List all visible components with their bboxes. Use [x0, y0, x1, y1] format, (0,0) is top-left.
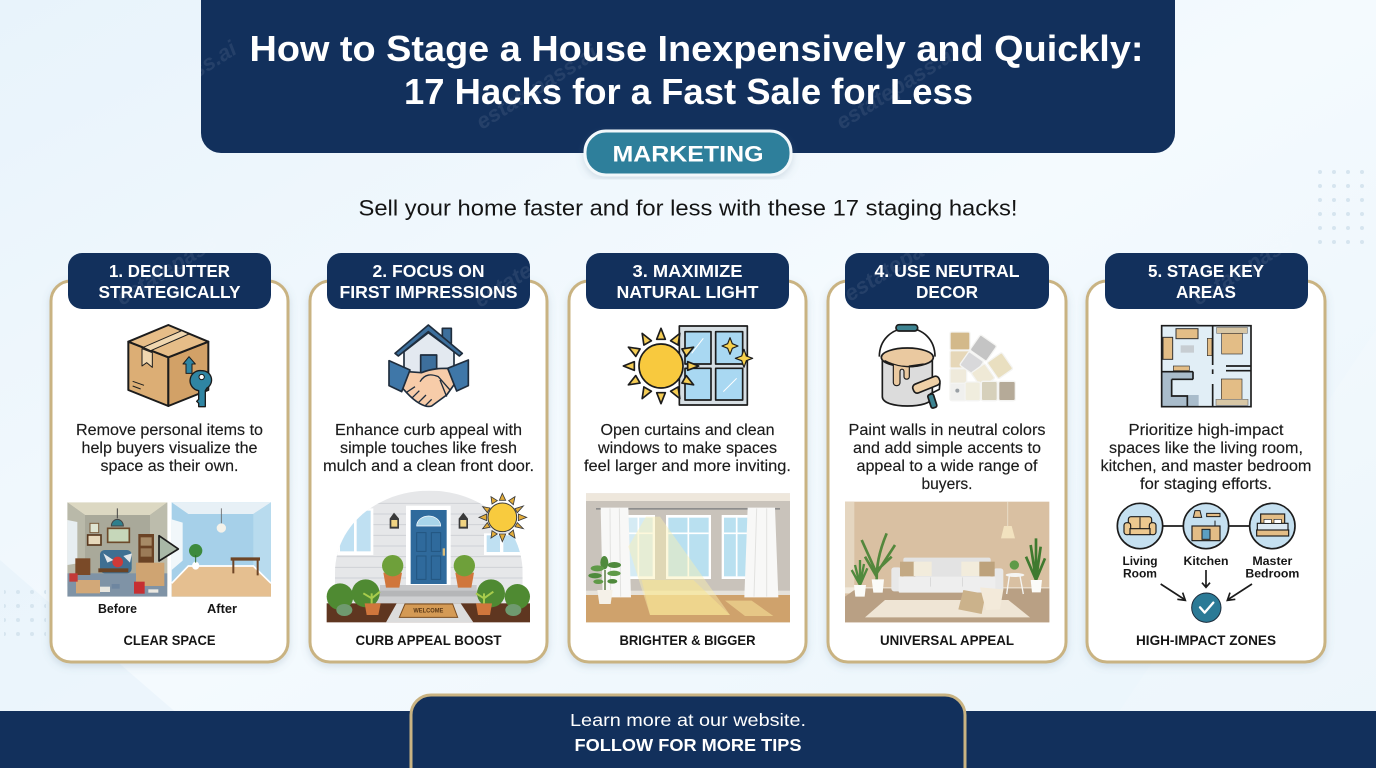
heading: estatepass: [111, 229, 221, 310]
description: mulch and a clean front door.: [323, 458, 534, 475]
caption: UNIVERSAL APPEAL: [880, 632, 1014, 648]
before and after image: [67, 502, 271, 597]
caption: BRIGHTER & BIGGER: [620, 632, 756, 648]
after label: After: [207, 602, 237, 616]
description: [848, 422, 1046, 493]
curb appeal image: [327, 491, 530, 622]
description: [1100, 422, 1312, 493]
heading: 4. USE NEUTRAL: [874, 261, 1020, 281]
arrows: [1161, 570, 1252, 600]
zone labels: Bedroom: [1245, 567, 1299, 581]
heading: 3. MAXIMIZE: [632, 261, 742, 281]
footer text: Learn more at our website.: [570, 710, 806, 730]
heading: 2. FOCUS ON: [372, 261, 484, 281]
icon: living room: [1117, 503, 1163, 549]
icon: sun and window: [623, 326, 753, 405]
footer text: [570, 710, 806, 755]
description: appeal to a wide range of: [856, 458, 1038, 475]
card frame: [310, 281, 547, 662]
neutral living room image: [845, 502, 1049, 622]
marketing pill: [585, 131, 791, 175]
card frame: [51, 281, 288, 662]
subtitle: Sell your home faster and for less with these 17 staging hacks!: [358, 196, 1018, 220]
panel: 3 natural light: [569, 253, 806, 662]
description: [76, 422, 263, 475]
caption: CLEAR SPACE: [124, 632, 216, 648]
high impact zones diagram: [1117, 503, 1299, 622]
header banner: estatepass.ai: [831, 39, 963, 134]
description: windows to make spaces: [597, 440, 777, 457]
card frame: [1087, 281, 1325, 662]
header banner: estatepass.ai: [110, 35, 242, 130]
footer band: [0, 695, 1376, 768]
description: for staging efforts.: [1140, 476, 1272, 493]
heading: NATURAL LIGHT: [616, 282, 759, 302]
card frame: [569, 281, 806, 662]
marketing pill: MARKETING: [612, 142, 764, 166]
zone labels: Living: [1122, 554, 1157, 568]
description: space as their own.: [100, 458, 238, 475]
description: Enhance curb appeal with: [335, 422, 522, 439]
heading: [586, 253, 789, 309]
description: and add simple accents to: [853, 440, 1041, 457]
header banner: [110, 0, 1175, 153]
caption: CURB APPEAL BOOST: [356, 632, 502, 648]
heading: estatepass: [1187, 229, 1297, 310]
icon: paint can and swatches: [879, 325, 1015, 409]
title: 17 Hacks for a Fast Sale for Less: [404, 71, 973, 112]
footer text: FOLLOW FOR MORE TIPS: [574, 735, 802, 755]
icon: kitchen: [1183, 503, 1229, 549]
caption: HIGH-IMPACT ZONES: [1136, 632, 1276, 648]
description: [584, 422, 791, 475]
heading: FIRST IMPRESSIONS: [340, 282, 518, 302]
description: Open curtains and clean: [600, 422, 774, 439]
zone labels: Kitchen: [1183, 554, 1228, 568]
before label: Before: [98, 602, 137, 616]
curb appeal image: WELCOME: [413, 609, 443, 615]
heading: [1105, 229, 1308, 310]
heading: [839, 225, 1049, 309]
zone labels: [1122, 554, 1299, 581]
header banner: estatepass.ai: [471, 39, 603, 134]
icon: check badge: [1192, 593, 1221, 622]
description: Paint walls in neutral colors: [848, 422, 1046, 439]
heading: 1. DECLUTTER: [109, 261, 230, 281]
heading: [327, 253, 537, 312]
icon: master bedroom: [1250, 503, 1295, 549]
description: buyers.: [922, 476, 972, 493]
heading: DECOR: [916, 282, 978, 302]
heading: AREAS: [1176, 282, 1236, 302]
title: How to Stage a House Inexpensively and Quickly:: [250, 28, 1144, 69]
card frame: [828, 281, 1066, 662]
description: kitchen, and master bedroom: [1100, 458, 1312, 475]
description: spaces like the living room,: [1109, 440, 1303, 457]
description: Remove personal items to: [76, 422, 263, 439]
title: [250, 28, 1144, 112]
description: simple touches like fresh: [340, 440, 517, 457]
panel: 1 declutter: [51, 229, 288, 662]
panel: 4 neutral decor: [828, 225, 1066, 662]
panel: 5 key areas: [1087, 229, 1325, 662]
heading: estate: [469, 257, 537, 312]
sunlit room image: [586, 493, 790, 622]
description: help buyers visualize the: [82, 440, 258, 457]
heading: estatepass: [839, 225, 949, 306]
heading: 5. STAGE KEY: [1148, 261, 1264, 281]
icon: box and key: [128, 325, 212, 407]
panel: 2 first impressions: [310, 253, 547, 662]
description: feel larger and more inviting.: [584, 458, 791, 475]
footer panel: [411, 695, 965, 768]
icon: house and handshake: [389, 325, 468, 406]
zone labels: Master: [1252, 554, 1293, 568]
description: [323, 422, 534, 475]
zone labels: Room: [1123, 567, 1157, 581]
description: Prioritize high-impact: [1128, 422, 1284, 439]
heading: STRATEGICALLY: [98, 282, 241, 302]
heading: [68, 229, 271, 310]
icon: floor plan: [1162, 326, 1251, 407]
